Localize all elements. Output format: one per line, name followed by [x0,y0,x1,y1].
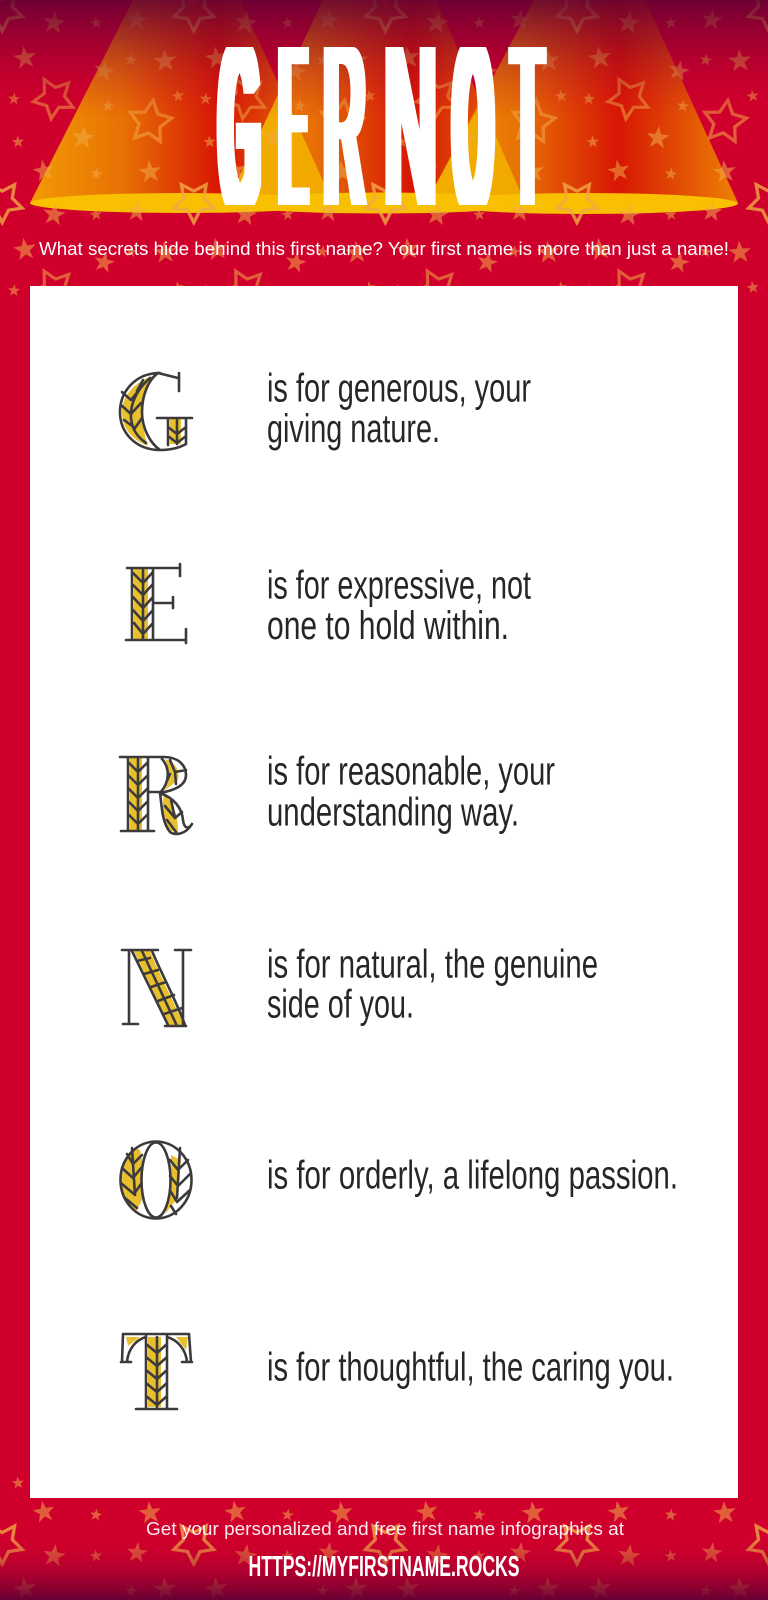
row: E [126,564,531,648]
row: N [122,942,598,1026]
icon: letter E [126,564,186,643]
title: R [324,0,365,254]
star pattern: top band [0,0,768,296]
text: E line: is for expressive, not [267,564,531,608]
star pattern: bottom band [0,1476,768,1599]
text: N line: side of you. [267,982,414,1026]
footer url: HTTPS://MYFIRSTNAME.ROCKS [248,1551,520,1583]
text: E line: one to hold within. [267,604,509,648]
white panel background [30,286,738,1498]
text: N line [267,942,598,1026]
text: E line [267,564,531,648]
top dark shade [0,0,768,120]
title: E [280,0,307,254]
subtitle: What secrets hide behind this first name? Your first name is more than just a name! [39,238,729,259]
icon: letter R [120,757,192,834]
text: N line: is for natural, the genuine [267,942,598,986]
icon: letter O [120,1142,192,1218]
row: O [120,1142,678,1218]
text: G line: giving nature. [267,407,440,451]
row: G [120,366,531,451]
text: G line: is for generous, your [267,366,531,410]
text: R line [267,750,555,834]
text: T [512,0,543,254]
text: R line: is for reasonable, your [267,750,555,794]
title [216,47,547,205]
icon: letter G [120,373,192,450]
row: T [121,1334,674,1409]
row: R [120,750,555,834]
icon: letter N [122,950,191,1026]
panel: letters [30,286,738,1498]
icon: letter T [121,1334,192,1409]
footer text: Get your personalized and free first name infographics at [146,1518,624,1539]
title: N [384,0,436,254]
bottom dark shade [0,1535,768,1600]
spotlight beams [30,0,738,214]
text: G line [267,366,531,451]
text: R line: understanding way. [267,790,519,834]
